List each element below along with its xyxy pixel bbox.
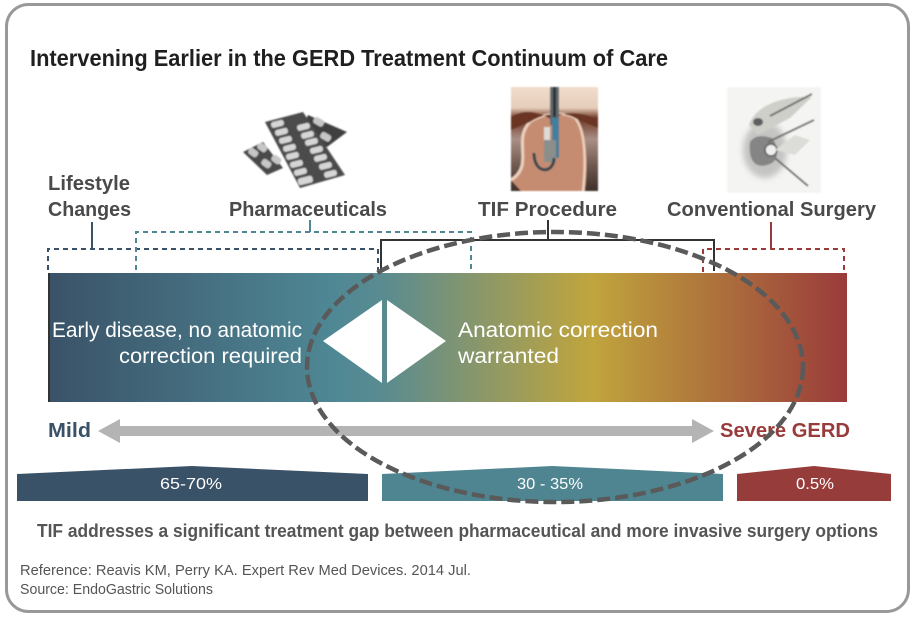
bracket: TIF procedure: [381, 220, 714, 271]
gradient continuum bar: [48, 273, 847, 402]
label: Lifestyle Changes: [48, 173, 131, 221]
dashed ellipse highlight: [307, 232, 803, 502]
text: anatomic correction: [457, 319, 658, 368]
stat: 65-70%: [17, 466, 368, 501]
stat: 30-35%: [382, 466, 723, 501]
summary statement: TIF addresses a significant treatment gap between pharmaceutical and more invasive surgery options: [37, 521, 878, 541]
references: Source: EndoGastric Solutions: [20, 582, 213, 598]
stat: 0.5%: 0.5%: [796, 476, 834, 493]
image: surgical illustration: [727, 87, 821, 193]
arrow: severity scale: [98, 419, 714, 443]
title: Intervening Earlier in the GERD Treatment Continuum of Care: [30, 45, 668, 71]
references: Reference: Reavis KM, Perry KA. Expert Rev Med Devices. 2014 Jul.: [20, 563, 471, 579]
stat: 30-35%: 30 - 35%: [517, 476, 583, 493]
text: early disease: [52, 319, 302, 368]
icon: left-right white triangles: [323, 300, 446, 383]
bracket: conventional surgery: [703, 222, 844, 272]
label: Severe GERD: Severe GERD: [720, 420, 850, 442]
label: Pharmaceuticals: Pharmaceuticals: [229, 199, 387, 221]
label: Conventional Surgery: Conventional Surgery: [667, 199, 877, 221]
stat: 65-70%: 65-70%: [160, 476, 222, 493]
text: early disease: Early disease, no anatomic: [52, 319, 302, 342]
image: TIF procedure device in stomach: [511, 87, 598, 191]
bracket: pharmaceuticals: [136, 220, 471, 270]
references: [20, 563, 471, 598]
label: TIF Procedure: TIF Procedure: [478, 199, 617, 221]
label: Lifestyle Changes: Lifestyle: [48, 173, 130, 195]
bracket: lifestyle changes: [48, 222, 378, 270]
text: early disease: correction required: [119, 345, 302, 368]
stat: 0.5%: [737, 466, 891, 501]
text: anatomic correction: warranted: [457, 345, 559, 368]
icon: blister packs of pills: [243, 112, 347, 188]
label: Mild: Mild: [48, 420, 91, 442]
label: Lifestyle Changes: Changes: [48, 199, 131, 221]
text: anatomic correction: Anatomic correction: [458, 319, 658, 342]
